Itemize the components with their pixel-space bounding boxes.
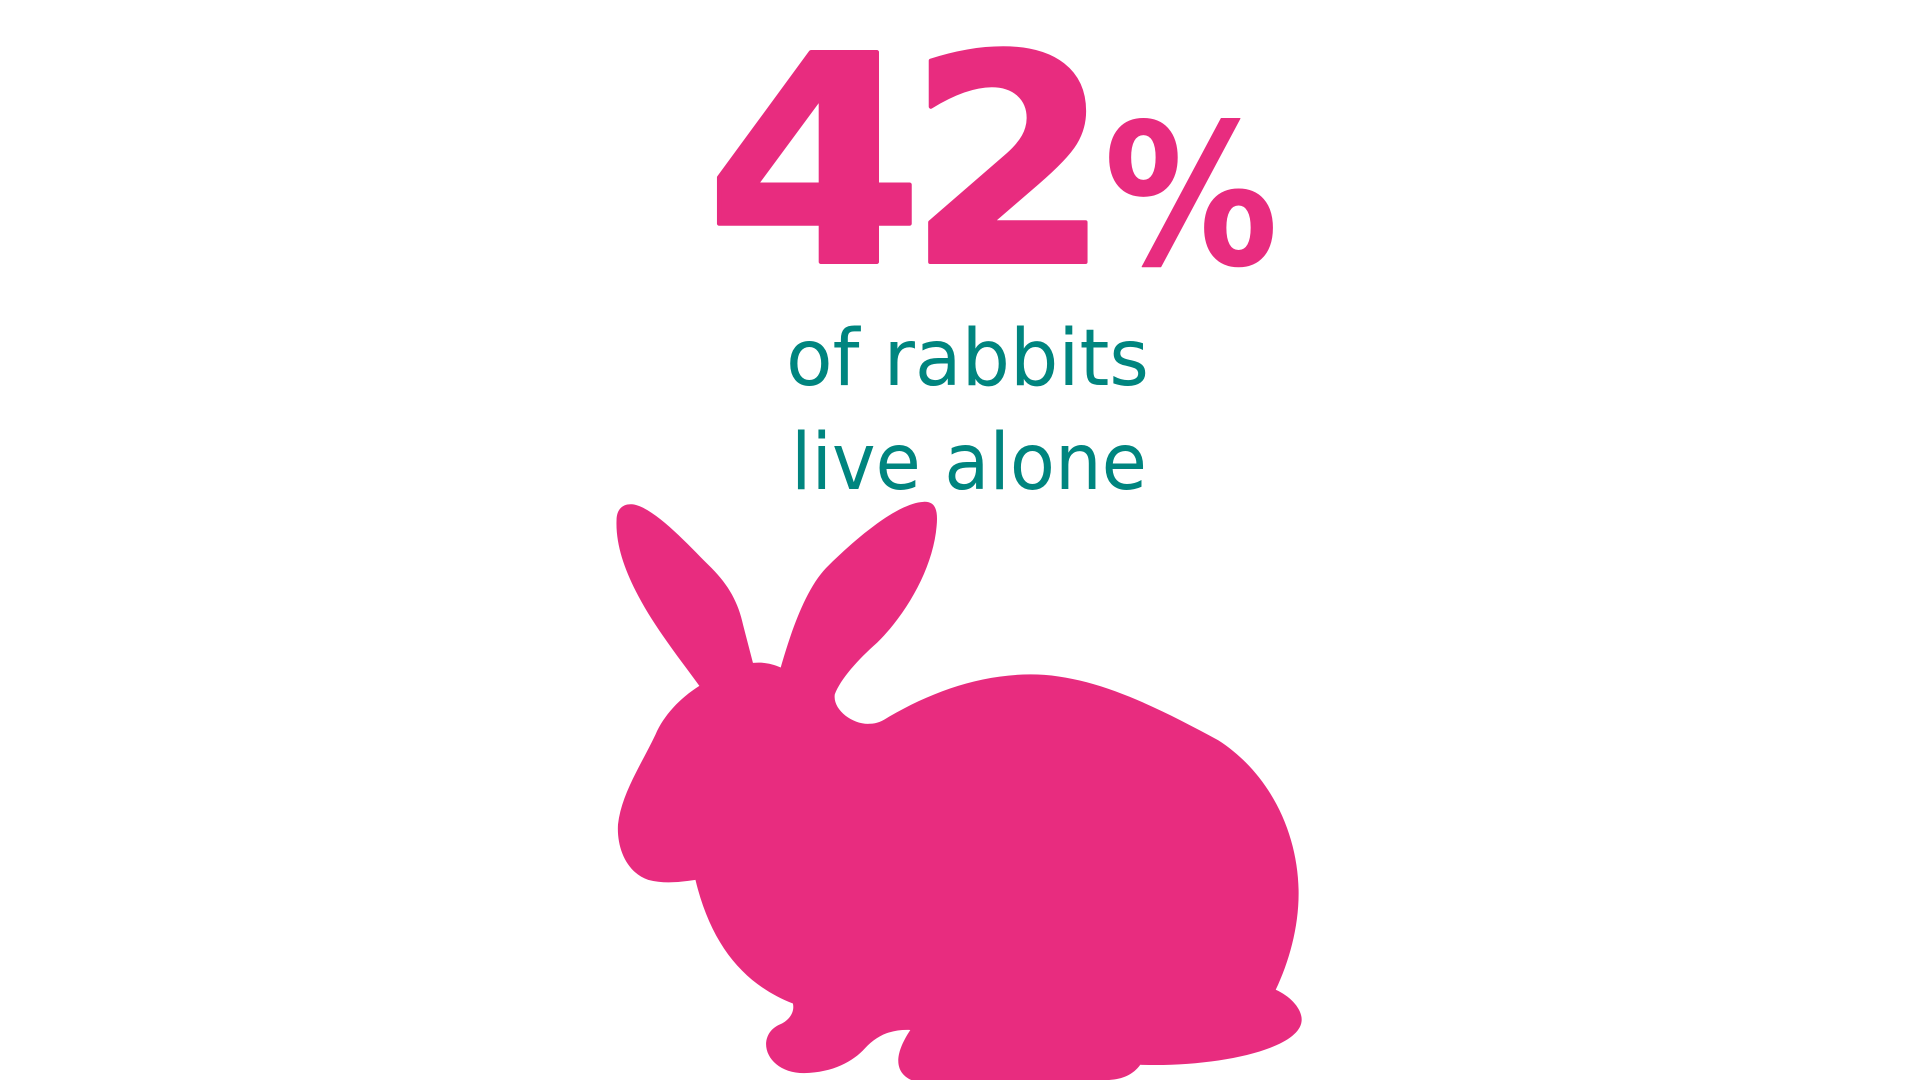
statistic: 42%: % [1104,83,1278,311]
caption: of rabbits live alone: live alone [791,418,1147,508]
statistic: 42%: 4 [705,0,924,330]
caption: of rabbits live alone [786,314,1149,508]
statistic: 42%: 2 [907,0,1111,330]
caption: of rabbits live alone: of rabbits [786,314,1149,404]
icon: rabbit silhouette [616,502,1302,1080]
statistic: 42% [705,0,1278,330]
